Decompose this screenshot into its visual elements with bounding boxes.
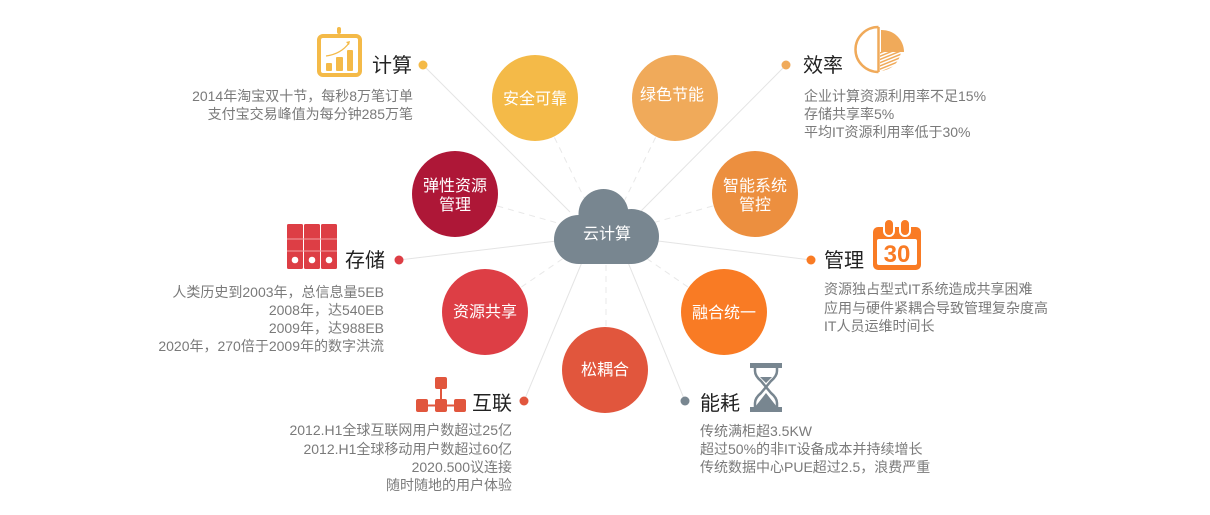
section: 计算: 2014年淘宝双十节，每秒8万笔订单 (192, 88, 413, 104)
icon: binders (287, 224, 337, 269)
icon: hourglass (750, 363, 782, 412)
section: 计算 (192, 27, 428, 122)
section: 互联: 随时随地的用户体验 (386, 477, 512, 493)
icon: network nodes (416, 377, 466, 412)
section: 存储: 存储 (345, 249, 385, 272)
section: 管理: 资源独占型式IT系统造成共享困难 (824, 281, 1032, 297)
circle: 弹性资源管理: 管理 (439, 196, 471, 214)
circle: 绿色节能: 绿色节能 (640, 86, 704, 104)
section: 互联 (289, 377, 528, 493)
section: 存储: 2008年，达540EB (269, 302, 384, 318)
section: 管理: 应用与硬件紧耦合导致管理复杂度高 (824, 300, 1048, 316)
section: 管理: IT人员运维时间长 (824, 318, 934, 334)
section: 效率: 企业计算资源利用率不足15% (804, 88, 986, 104)
circle: 融合统一 (681, 269, 767, 355)
circle: 资源共享 (442, 269, 528, 355)
section: 效率: 效率 (803, 54, 843, 77)
circle: 资源共享: 资源共享 (453, 303, 517, 321)
section: 存储 (158, 224, 404, 354)
section: 互联: 2020.500议连接 (412, 459, 512, 475)
section: 能耗 (680, 363, 930, 475)
section: 存储: 2020年，270倍于2009年的数字洪流 (158, 338, 384, 354)
circle: 松耦合: 松耦合 (581, 361, 629, 379)
section: 能耗: 传统数据中心PUE超过2.5，浪费严重 (700, 459, 930, 475)
cloud: 云计算 (554, 189, 659, 264)
section: 能耗: 传统满柜超3.5KW (700, 423, 813, 439)
section: 互联: 2012.H1全球互联网用户数超过25亿 (289, 422, 512, 438)
section: 效率: 存储共享率5% (804, 106, 894, 122)
section: 互联: 互联 (472, 392, 512, 415)
section: 能耗: 超过50%的非IT设备成本并持续增长 (700, 441, 922, 457)
circle: 弹性资源管理: 弹性资源 (423, 177, 487, 195)
section: 存储: 人类历史到2003年，总信息量5EB (172, 284, 384, 300)
section: 效率 (782, 27, 986, 140)
section: 互联: 2012.H1全球移动用户数超过60亿 (303, 441, 512, 457)
cloud: 云计算: 云计算 (583, 224, 631, 243)
section: 能耗: 能耗 (700, 392, 740, 415)
circle: 安全可靠 (492, 55, 578, 141)
icon: calendar 30 (873, 219, 921, 270)
section: 管理 (806, 219, 1048, 334)
circle: 绿色节能 (632, 55, 718, 141)
icon: calendar 30: 30 (884, 241, 910, 268)
icon: pie chart (856, 27, 904, 72)
section: 计算: 计算 (372, 54, 412, 77)
circle: 融合统一: 融合统一 (692, 304, 756, 322)
circle: 松耦合 (562, 327, 648, 413)
circle: 智能系统管控 (712, 151, 798, 237)
section: 存储: 2009年，达988EB (269, 320, 384, 336)
icon: bar chart board (319, 27, 360, 75)
section: 计算: 支付宝交易峰值为每分钟285万笔 (208, 106, 413, 122)
section: 效率: 平均IT资源利用率低于30% (804, 124, 970, 140)
circle: 智能系统管控: 智能系统 (723, 177, 787, 195)
circle: 安全可靠: 安全可靠 (503, 90, 567, 108)
circle: 智能系统管控: 管控 (739, 196, 771, 214)
circle: 弹性资源管理 (412, 151, 498, 237)
section: 管理: 管理 (824, 249, 864, 272)
